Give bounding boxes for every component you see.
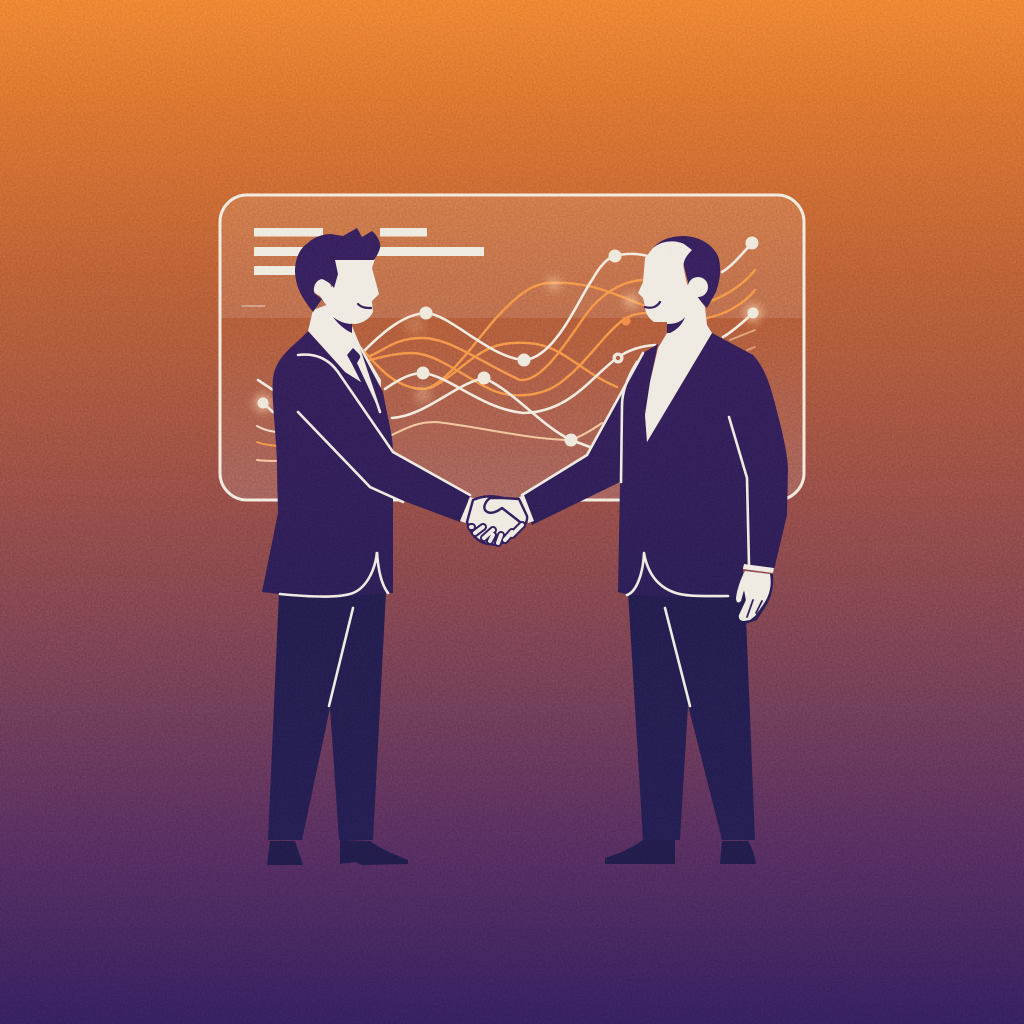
clasped hands — [467, 496, 527, 545]
left man neck shadow — [333, 317, 352, 333]
panel lower glass — [220, 318, 804, 500]
small caption mark — [242, 305, 265, 307]
left man jacket and arm — [262, 331, 470, 597]
right man trousers — [628, 592, 755, 840]
right man hair — [653, 236, 720, 308]
panel outline — [220, 195, 804, 500]
right man face and neck — [638, 241, 712, 333]
right man chin shadow — [667, 317, 685, 334]
left man ear — [313, 278, 331, 296]
orange chart lines — [358, 270, 755, 395]
faint orange and cream lines — [257, 330, 755, 461]
panel upper glass band — [220, 195, 804, 318]
right man hand and cuff — [736, 564, 774, 624]
figure: left man — [262, 228, 470, 865]
right man ear — [688, 277, 708, 297]
left man smile — [358, 304, 371, 308]
thumb outline — [484, 498, 520, 522]
left man jacket seams — [280, 352, 470, 706]
right man jacket seams — [522, 353, 749, 706]
shirt cuffs — [460, 495, 534, 523]
left man neck and shirt — [308, 300, 381, 414]
right man cuff — [743, 564, 774, 573]
finger fills — [471, 525, 522, 543]
left man trousers — [268, 592, 386, 840]
finger outlines — [471, 525, 522, 543]
right man shoes — [605, 840, 756, 864]
left man hair — [295, 228, 380, 312]
right man hand — [736, 571, 771, 621]
chart data nodes — [258, 236, 758, 446]
right man smile — [645, 302, 660, 308]
handshake — [460, 495, 534, 545]
left man face — [320, 259, 379, 324]
right man shirt V — [645, 333, 712, 442]
panel: translucent chart screen — [220, 195, 804, 500]
chart glows — [255, 278, 761, 411]
left man shoes — [267, 840, 408, 865]
figure: right man — [522, 236, 788, 864]
white chart lines — [258, 243, 753, 447]
header text placeholder bars — [254, 228, 484, 275]
right man jacket and arm — [522, 333, 788, 597]
right man finger gaps — [747, 600, 762, 617]
left man tie — [347, 348, 378, 408]
right man hand shadow — [745, 574, 773, 624]
